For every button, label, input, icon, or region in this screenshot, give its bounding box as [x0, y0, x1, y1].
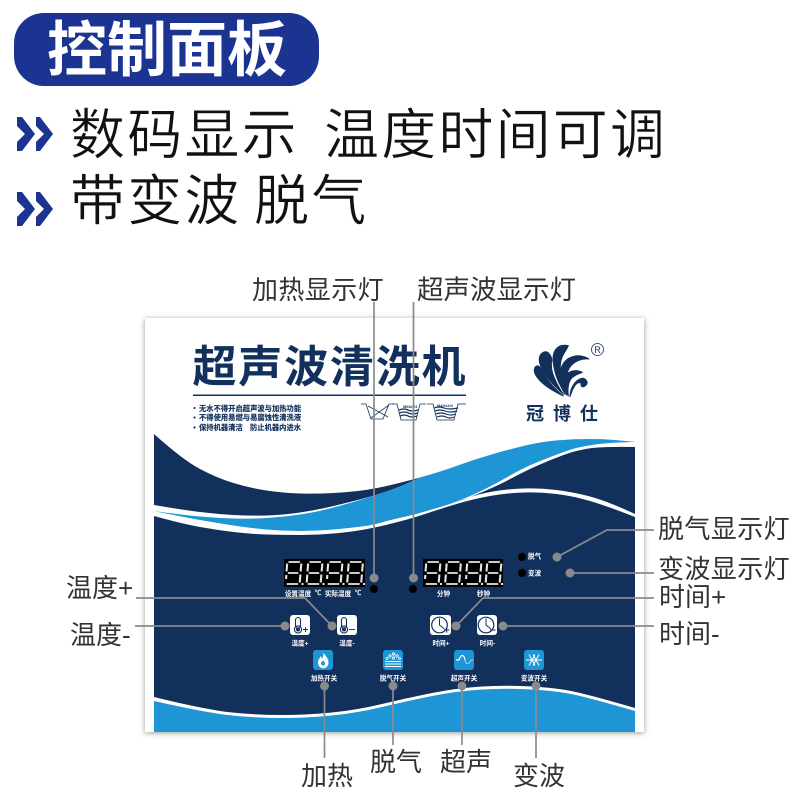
warning notes: 防止机器内进水: [250, 423, 302, 432]
callout: time minus: 时间-: [659, 619, 720, 649]
display captions: 设置温度: [285, 589, 312, 598]
callout: degas lamp: 脱气显示灯: [658, 514, 790, 544]
callout: heating lamp: [252, 275, 384, 582]
display captions: 实际温度: [325, 589, 352, 598]
panel title: 超声波清洗机: [192, 343, 467, 392]
button captions: 时间+: [432, 638, 450, 648]
icon: temperature minus: [337, 615, 357, 635]
feature line 2: 带变波: [70, 170, 242, 232]
display captions: ℃: [315, 589, 322, 597]
switch captions: [311, 674, 548, 682]
icons: water level tanks: [361, 404, 466, 420]
callout: ultrasonic lamp: [409, 275, 576, 582]
logo: R: [594, 345, 601, 355]
callout: temperature minus: 温度-: [70, 620, 131, 650]
button captions: 温度-: [339, 638, 355, 648]
icon: sweep switch: [524, 650, 544, 670]
callout: degas switch: 脱气: [370, 747, 422, 777]
switch captions: 变波开关: [521, 674, 548, 682]
callout: ultrasonic switch: 超声: [440, 747, 492, 777]
display captions: 分钟: [437, 589, 450, 598]
button captions: 温度+: [291, 638, 309, 648]
wave artwork: [154, 434, 635, 732]
callout: heating lamp: 加热显示灯: [252, 275, 384, 305]
callout: temperature minus: [70, 620, 290, 650]
callout: sweep switch: [513, 682, 565, 791]
feature line 2: [70, 170, 368, 232]
callout: degas switch: [370, 682, 422, 777]
icon: time minus: [477, 615, 497, 635]
warning notes: 无水不得开启超声波与加热功能: [199, 404, 302, 413]
feature line 2: 脱气: [254, 170, 368, 232]
warning notes: 保持机器清洁: [199, 423, 243, 432]
logo: [526, 344, 607, 424]
display captions: ℃: [355, 589, 362, 597]
icon: degas switch: [383, 650, 403, 670]
switch captions: 加热开关: [311, 674, 338, 682]
callout: ultrasonic lamp: 超声波显示灯: [417, 275, 576, 305]
callout: sweep lamp: 变波显示灯: [658, 554, 790, 584]
indicator lamps: [370, 553, 526, 593]
logo: 冠博仕: [526, 404, 607, 424]
panel: control panel: [145, 318, 644, 733]
callout: heating switch: 加热: [301, 761, 353, 791]
callout: sweep lamp: [566, 554, 790, 584]
icon: heating switch: [313, 650, 333, 670]
lamp captions: [528, 552, 542, 578]
lamp captions: 脱气: [528, 552, 542, 560]
switch captions: 超声开关: [451, 674, 478, 682]
callout: temperature plus: [66, 573, 336, 630]
icon: double chevron line 1: [17, 117, 53, 151]
icon: time plus: [430, 615, 451, 635]
switch captions: 脱气开关: [380, 674, 407, 682]
callout: temperature plus: 温度+: [66, 573, 133, 603]
icon: ultrasonic switch: [454, 650, 474, 670]
display captions: [285, 589, 490, 598]
feature line 1: 温度时间可调: [324, 104, 667, 166]
display: time: [423, 559, 503, 587]
callout: degas lamp: [552, 514, 790, 562]
callout: sweep switch: 变波: [513, 761, 565, 791]
button captions: [291, 638, 495, 648]
callout: heating switch: [301, 682, 353, 791]
heading: 控制面板: 控制面板: [47, 17, 287, 84]
display captions: 秒钟: [477, 589, 490, 598]
callout: time minus: [498, 619, 720, 649]
icon: temperature plus: [290, 615, 310, 635]
icon: double chevron line 2: [17, 192, 53, 226]
button captions: 时间-: [480, 638, 495, 648]
icons: water level tanks: MIN≥1/3: [403, 405, 417, 409]
display: temperature: [284, 559, 365, 587]
callout: ultrasonic switch: [440, 682, 492, 777]
warning notes: 不得使用易燃与易腐蚀性清洗液: [199, 413, 302, 422]
callout: time plus: [452, 582, 726, 630]
lamp captions: 变波: [528, 568, 542, 578]
callout: time plus: 时间+: [659, 582, 726, 612]
feature line 1: 数码显示: [70, 104, 299, 166]
feature line 1: [70, 104, 667, 166]
icons: water level tanks: MAX≤3/4: [437, 404, 454, 408]
warning notes: [194, 404, 302, 432]
